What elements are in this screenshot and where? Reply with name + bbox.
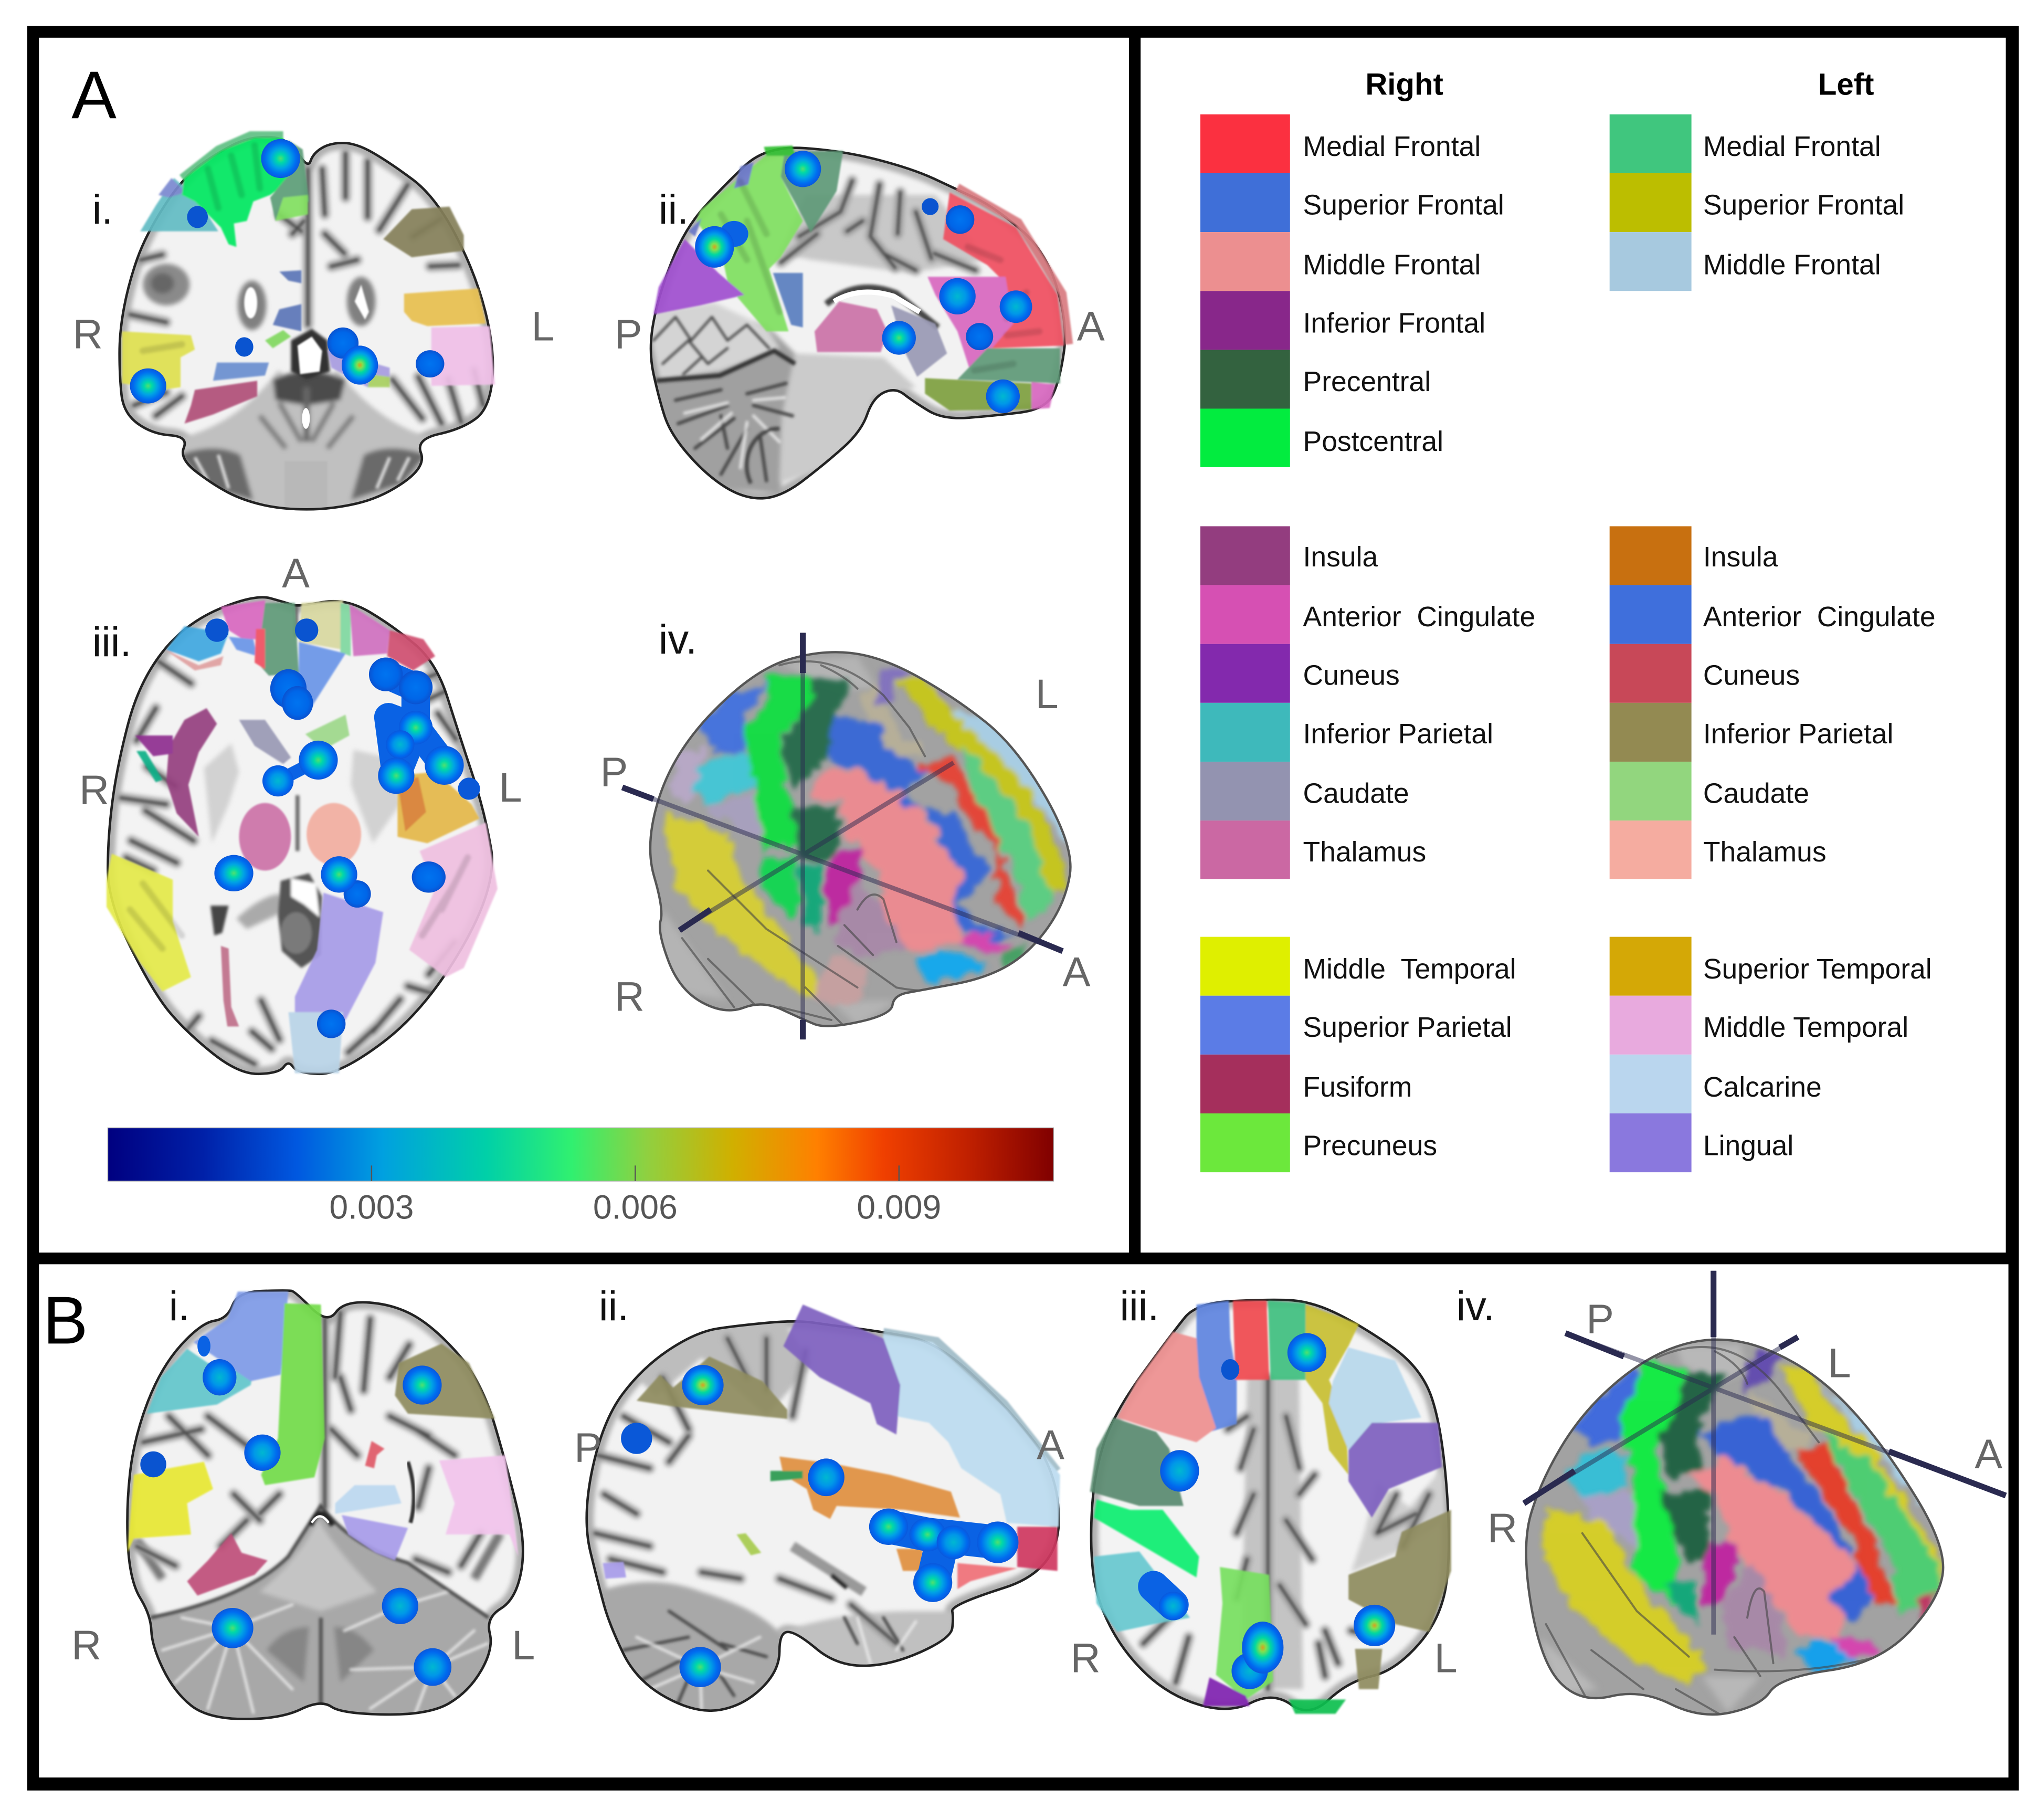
legend group left 3: Calcarine <box>1703 1072 1822 1103</box>
legend group left 2 <box>1610 526 1936 879</box>
view A-i coronal brain <box>120 135 495 513</box>
label: L: L <box>531 303 554 350</box>
label: L: L <box>1828 1340 1851 1386</box>
label: i.: i. <box>92 186 113 233</box>
legend group right 1: Postcentral <box>1303 426 1443 457</box>
legend group right 3: Precuneus <box>1303 1130 1437 1161</box>
panel B <box>43 1271 2006 1728</box>
regions <box>128 1291 519 1596</box>
legend group right 1 <box>1200 114 1504 467</box>
legend group right 2: Anterior Cingulate <box>1303 602 1535 633</box>
legend group left 1: Middle Frontal <box>1703 249 1881 280</box>
label: R: R <box>73 310 103 357</box>
legend group left 2: Inferior Parietal <box>1703 719 1893 750</box>
label: P: P <box>1586 1296 1614 1342</box>
view B-iv 3D brain <box>1524 1271 2006 1715</box>
legend group left 3: Superior Temporal <box>1703 954 1932 985</box>
label: L: L <box>1036 670 1059 717</box>
legend group right 3: Middle Temporal <box>1303 954 1516 985</box>
colorbar: 0.006 <box>593 1188 678 1226</box>
label: L: L <box>1434 1635 1458 1681</box>
legend group left 2: Cuneus <box>1703 660 1800 691</box>
axis lines <box>622 633 1063 1039</box>
label: L: L <box>512 1622 535 1668</box>
view A-ii sagittal brain <box>646 145 1069 498</box>
label: iii.: iii. <box>1120 1282 1159 1329</box>
legend group right 3 <box>1200 937 1516 1172</box>
legend group left 3: Lingual <box>1703 1130 1793 1161</box>
legend group right 2: Inferior Parietal <box>1303 719 1493 750</box>
legend group left 2: Thalamus <box>1703 837 1827 868</box>
legend group right 1: Inferior Frontal <box>1303 308 1485 339</box>
panel A <box>71 57 1105 1226</box>
activation blobs <box>205 618 480 1038</box>
view A-iii axial brain <box>107 597 498 1074</box>
legend group right 1: Medial Frontal <box>1303 131 1481 162</box>
panel A background <box>39 38 1129 1253</box>
legend group right 1: Superior Frontal <box>1303 190 1504 220</box>
label: A: A <box>1975 1430 2002 1477</box>
activation blobs <box>130 139 444 404</box>
label: R: R <box>71 1622 101 1668</box>
label: R: R <box>615 973 645 1020</box>
regions <box>122 135 495 424</box>
legend group right 2: Cuneus <box>1303 660 1400 691</box>
label: A: A <box>1063 949 1091 995</box>
legend panel <box>1200 68 1936 1172</box>
label: iii.: iii. <box>92 618 132 665</box>
label: P: P <box>615 310 642 357</box>
activation blobs <box>695 151 1032 413</box>
label: P: P <box>600 748 628 795</box>
legend group right 2: Caudate <box>1303 779 1409 809</box>
regions <box>603 1304 1060 1589</box>
label: L: L <box>499 764 522 811</box>
legend group left 1 <box>1610 114 1904 291</box>
label: ii.: ii. <box>659 186 689 233</box>
legend group left 2: Caudate <box>1703 779 1809 809</box>
view A-iv 3D brain <box>622 633 1072 1039</box>
legend heading: Right: Right <box>1365 68 1443 102</box>
heading: B: B <box>43 1282 88 1358</box>
colorbar: 0.003 <box>329 1188 414 1226</box>
label: ii.: ii. <box>599 1282 629 1329</box>
activation blobs <box>621 1365 1018 1687</box>
legend group right 3: Fusiform <box>1303 1072 1412 1103</box>
colorbar: 0.009 <box>857 1188 941 1226</box>
legend group left 1: Superior Frontal <box>1703 190 1904 220</box>
label: A: A <box>282 550 310 596</box>
view B-iii axial brain <box>1090 1300 1451 1714</box>
legend group right 2: Insula <box>1303 542 1378 573</box>
legend group left 3 <box>1610 937 1932 1172</box>
legend group left 2: Anterior Cingulate <box>1703 602 1936 633</box>
label: A: A <box>1037 1422 1064 1468</box>
legend group left 2: Insula <box>1703 542 1778 573</box>
axis lines <box>1524 1271 2006 1635</box>
legend group left 3: Middle Temporal <box>1703 1012 1908 1043</box>
label: R: R <box>79 766 109 813</box>
regions <box>1090 1301 1451 1714</box>
panel B background <box>39 1264 2009 1777</box>
label: P: P <box>574 1424 602 1471</box>
heading: A: A <box>71 57 117 133</box>
view B-i coronal brain <box>128 1290 523 1728</box>
colorbar <box>108 1128 1053 1226</box>
legend group right 1: Precentral <box>1303 366 1431 397</box>
label: i.: i. <box>169 1282 189 1329</box>
regions <box>107 601 498 1073</box>
legend heading: Left: Left <box>1818 68 1874 102</box>
activation blobs <box>140 1335 451 1686</box>
legend group right 3: Superior Parietal <box>1303 1012 1512 1043</box>
activation blobs <box>1154 1333 1395 1689</box>
view B-ii sagittal brain <box>587 1304 1060 1728</box>
panel legend background <box>1141 38 2006 1253</box>
label: R: R <box>1487 1505 1517 1551</box>
legend group right 1: Middle Frontal <box>1303 249 1481 280</box>
legend group right 2: Thalamus <box>1303 837 1426 868</box>
label: A: A <box>1077 303 1105 350</box>
legend group right 2 <box>1200 526 1535 879</box>
label: iv.: iv. <box>1456 1282 1495 1329</box>
legend group left 1: Medial Frontal <box>1703 131 1881 162</box>
label: R: R <box>1071 1635 1101 1681</box>
regions <box>653 145 1069 411</box>
label: iv.: iv. <box>659 616 697 662</box>
